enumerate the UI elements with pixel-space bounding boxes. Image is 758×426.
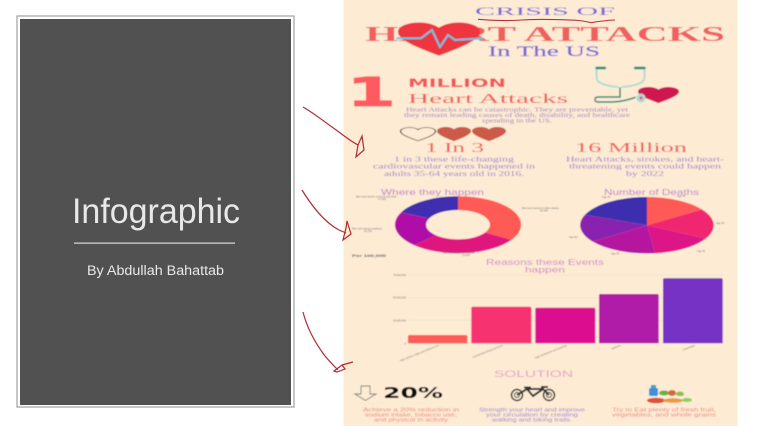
donut slice labels: 26,700 — [364, 229, 372, 233]
bar labels — [399, 343, 696, 363]
pie slice labels: Age 55 — [611, 252, 620, 256]
chart title: reasons these events happen: happen — [525, 264, 565, 274]
text: sodium reduction — [363, 408, 459, 424]
donut slice labels: Men and women in other places — [522, 206, 559, 210]
stat: 16 million: 16 Million — [575, 141, 687, 156]
stat: 20 percent: 20% — [383, 384, 443, 402]
chart title: where they happen: Where they happen — [381, 187, 484, 197]
icon: heart with pulse — [396, 22, 483, 56]
text: healthy eating — [612, 408, 717, 418]
text: intro paragraph: they remain leading causes of death, disability, and healthcare — [404, 112, 630, 119]
text: 1 in 3 description: adults 35-64 years old in 2016. — [384, 170, 524, 178]
text: healthy eating: Try to Eat plenty of fresh fruit, — [612, 408, 716, 414]
chart title: reasons these events happen — [486, 257, 604, 274]
text: sodium reduction: sodium intake, tobacco use, — [365, 412, 457, 418]
donut slice labels — [352, 194, 559, 257]
text: 16 million description: threatening events could happen — [569, 162, 722, 170]
panel: title slide — [17, 16, 294, 407]
donut slice labels: 47,400 — [378, 197, 386, 201]
text: strengthen heart: your circulation by creating — [486, 412, 578, 418]
icon: down arrow — [355, 386, 376, 400]
chart: bars of reasons — [393, 273, 723, 363]
heading: in the us: In The US — [488, 44, 600, 60]
text: strengthen heart: walking and biking trails. — [492, 418, 572, 424]
icon: healthy food — [647, 385, 692, 403]
chart: donut where they happen — [352, 194, 559, 257]
stat: big number one: 1 — [346, 69, 396, 116]
panel: infographic poster — [344, 0, 738, 426]
chart title: reasons these events happen: Reasons these Events — [486, 257, 604, 267]
bar labels: Uncontrolled blood pressure — [472, 343, 504, 359]
chart: bars of reasons: 75,000,000 — [393, 273, 407, 277]
stat: 1 in 3: 1 In 3 — [425, 141, 484, 156]
text: intro paragraph — [404, 108, 630, 124]
text: 16 million description: by 2022 — [626, 170, 665, 178]
text: intro paragraph: Heart Attacks can be catastrophic. They are preventable, yet — [406, 108, 629, 114]
text: sodium reduction: and physical in activity — [374, 418, 449, 424]
bar labels: Overweight — [682, 343, 696, 352]
donut slice labels: 29,500 — [462, 253, 470, 257]
icon: bicycle — [512, 387, 554, 400]
heading: heart attacks: HEART ATTACKS — [365, 22, 725, 46]
pie slice labels: Age 40 — [677, 194, 686, 198]
heading: crisis of: CRISIS OF — [475, 4, 616, 18]
note: per 100,000: Per 100,000 — [352, 253, 387, 258]
donut slice labels: Men and women in hospital — [443, 250, 475, 254]
bar labels: High sodium intake and tobacco use — [399, 343, 440, 363]
text: healthy eating: vegetables, and whole grains — [612, 412, 717, 418]
chart: bars of reasons: 50,000,000 — [393, 296, 407, 300]
stat: heart attacks: Heart Attacks — [408, 92, 568, 107]
pie slice labels: Age 50 — [697, 249, 706, 253]
pie slice labels: Age 60 — [569, 235, 578, 239]
icon: stethoscope and heart — [595, 68, 679, 103]
text: 16 million description: Heart Attacks, strokes, and heart- — [566, 156, 725, 164]
donut slice labels: Men and women outdoors — [352, 226, 383, 230]
pie slice labels: Age 35 — [602, 195, 611, 199]
arrow: third annotation — [303, 312, 353, 372]
bar labels: High cholesterol and inactivity — [534, 343, 568, 360]
donut slice labels: Men and women at home and work — [356, 194, 397, 198]
pie slice labels — [569, 194, 725, 256]
arrow: first annotation — [303, 107, 364, 157]
text: intro paragraph: spending in the US. — [482, 118, 553, 124]
text: 1 in 3 description: 1 in 3 these life-changing — [394, 156, 515, 164]
scribble: red underline — [478, 19, 615, 23]
chart: bars of reasons: 25,000,000 — [393, 318, 407, 322]
text: 1 in 3 description — [373, 156, 536, 178]
donut slice labels: 50,300 — [540, 208, 548, 212]
text: sodium reduction: Achieve a 20% reduction in — [363, 408, 459, 414]
text: strengthen heart: Strength your heart and improve — [479, 408, 585, 414]
text: strengthen heart — [479, 408, 585, 424]
pie slice labels: Age 45 — [716, 221, 725, 225]
stat: million: MILLION — [408, 76, 506, 90]
text: 1 in 3 description: cardiovascular events happened in — [373, 162, 536, 170]
arrow: second annotation — [302, 190, 351, 240]
bar labels: Diabetes — [610, 343, 622, 351]
chart: bars of reasons: 0 — [405, 341, 407, 345]
icon: one in three hearts — [400, 127, 506, 141]
heading: solution: SOLUTION — [494, 369, 573, 379]
slide title: Infographic — [72, 192, 240, 231]
chart: pie number of deaths — [569, 194, 725, 256]
chart title: number of deaths: Number of Deaths — [604, 187, 699, 197]
slide subtitle: By Abdullah Bahattab — [87, 263, 224, 278]
text: 16 million description — [566, 156, 725, 178]
